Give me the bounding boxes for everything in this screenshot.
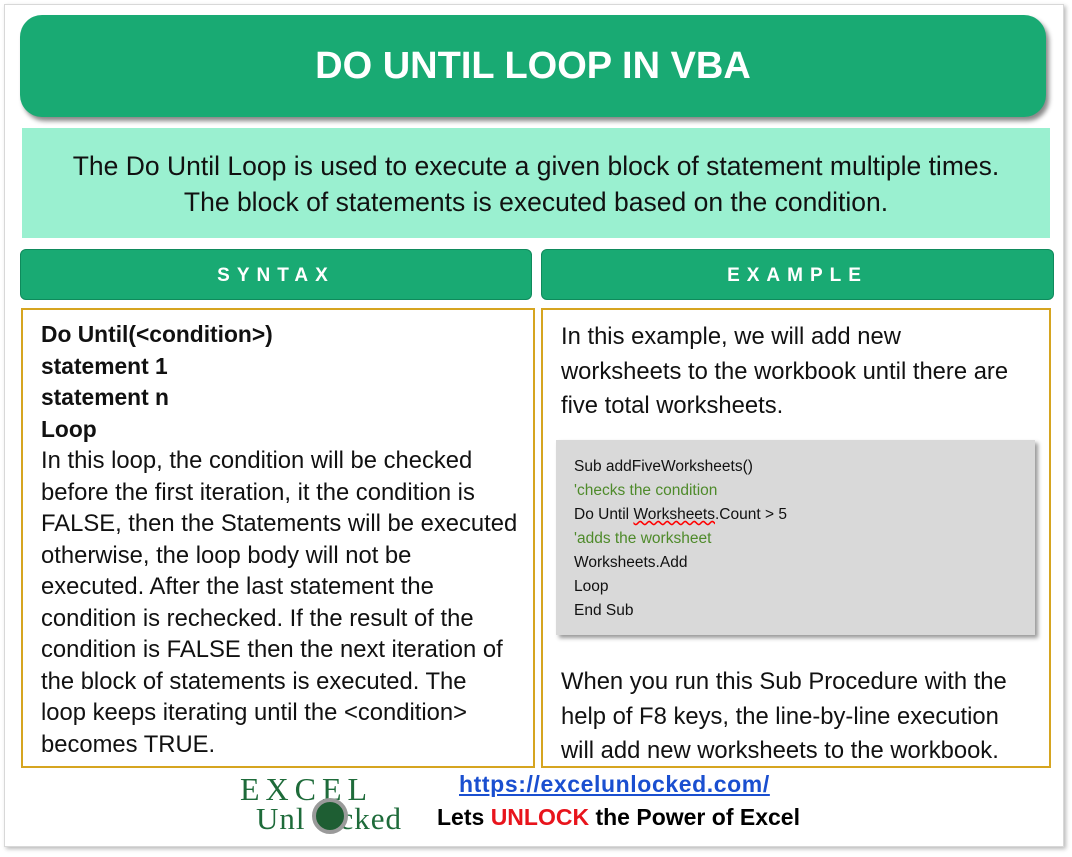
panel: example: will add new worksheets to the workbook. (561, 737, 999, 764)
panel: example: help of F8 keys, the line-by-line execution (561, 702, 999, 730)
panel: syntax: otherwise, the loop body will not be (41, 542, 411, 568)
code block: Sub addFiveWorksheets() (574, 458, 753, 475)
code block: 'checks the condition (574, 482, 717, 499)
panel: syntax: FALSE, then the Statements will be executed (41, 510, 517, 537)
code block: 'adds the worksheet (574, 530, 711, 547)
heading: example: EXAMPLE (727, 265, 868, 286)
heading: syntax (20, 249, 532, 300)
logo: EXCEL (240, 771, 373, 807)
intro text: The Do Until Loop is used to execute a given block of statement multiple times. (73, 151, 999, 181)
code block: Worksheets.Add (574, 554, 687, 571)
title (20, 15, 1046, 117)
panel: syntax: loop keeps iterating until the <condition> (41, 699, 467, 726)
panel: syntax: statement 1 (41, 352, 168, 378)
panel: example: worksheets to the workbook until there are (561, 358, 1008, 384)
heading: syntax: SYNTAX (217, 265, 335, 286)
panel: syntax: Loop (41, 416, 97, 442)
panel: syntax: condition is FALSE then the next iteration of (41, 636, 503, 663)
logo: Unl cked (256, 801, 402, 836)
link: https://excelunlocked.com/ (459, 771, 770, 797)
code block: Loop (574, 578, 608, 595)
panel: syntax: Do Until(<condition>) (41, 321, 273, 347)
code block: End Sub (574, 602, 633, 619)
panel: example: five total worksheets. (561, 392, 783, 419)
tagline: Lets UNLOCK the Power of Excel (437, 804, 800, 830)
panel: syntax: executed. After the last statement the (41, 573, 434, 600)
code block (556, 440, 1035, 635)
panel: syntax: In this loop, the condition will be checked (41, 447, 472, 474)
panel: syntax: becomes TRUE. (41, 730, 215, 758)
panel: syntax: statement n (41, 384, 169, 410)
panel: example: In this example, we will add new (561, 323, 901, 350)
panel: syntax: before the first iteration, it the condition is (41, 478, 475, 506)
panel: example: When you run this Sub Procedure with the (561, 668, 1007, 695)
code block: Do Until Worksheets.Count > 5 (574, 506, 787, 523)
panel: syntax (21, 308, 535, 768)
heading: example (541, 249, 1054, 300)
title: DO UNTIL LOOP IN VBA (315, 45, 751, 87)
intro text: The block of statements is executed based on the condition. (184, 187, 888, 217)
intro text (22, 128, 1050, 238)
panel: example (541, 308, 1051, 768)
panel: syntax: the block of statements is executed. The (41, 668, 466, 694)
panel: syntax: condition is rechecked. If the result of the (41, 604, 474, 632)
logo (240, 771, 402, 836)
